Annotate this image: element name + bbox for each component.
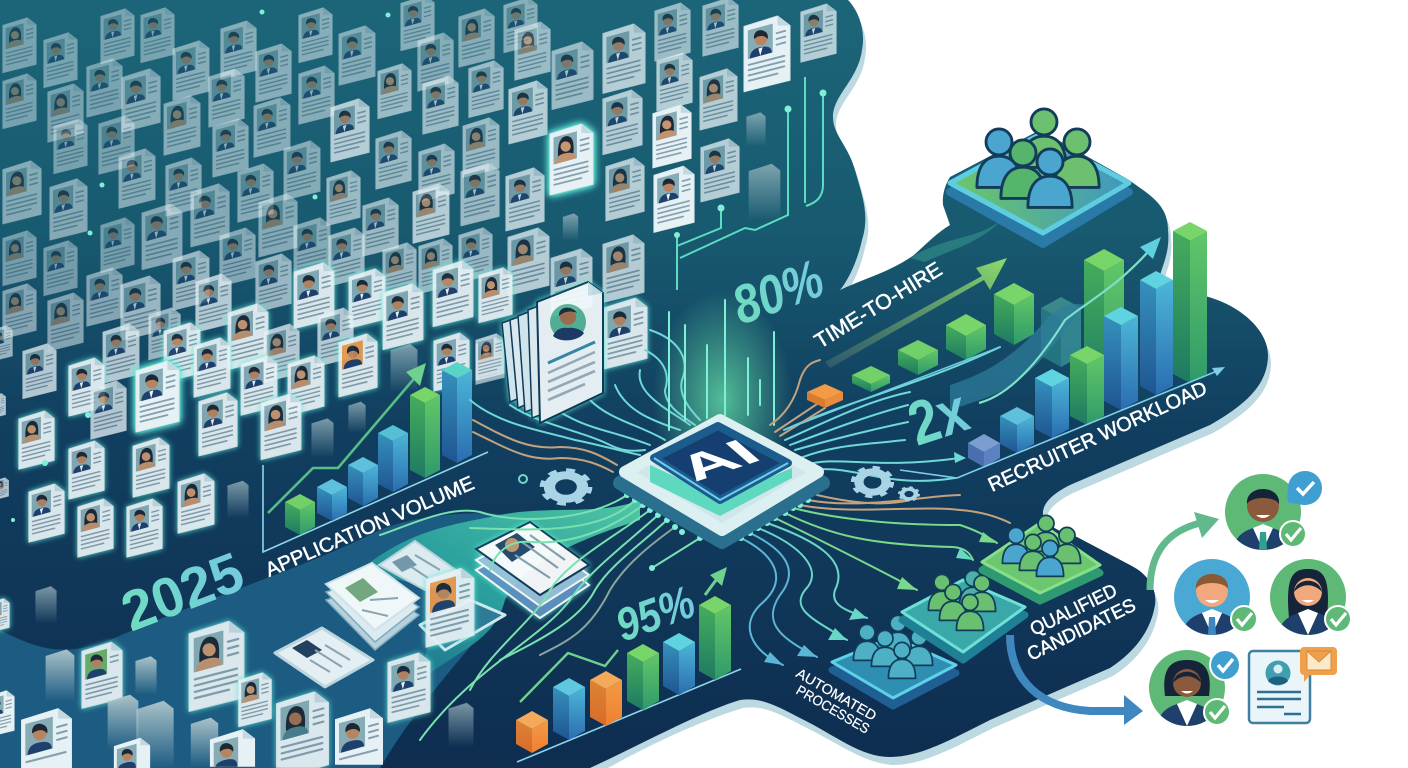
bar blue 5 <box>663 633 695 695</box>
timeline line <box>784 347 1000 430</box>
bar green 4 <box>627 644 659 710</box>
bar f1 <box>968 434 1000 467</box>
icon: green check 2 <box>1231 606 1257 632</box>
platform: talent pool, top <box>950 109 1129 244</box>
up arrow <box>705 567 727 595</box>
fifth row of resumes <box>3 194 644 317</box>
bar 4 <box>378 425 408 492</box>
lower left traces <box>380 495 700 740</box>
bar f2 <box>1000 407 1034 453</box>
main resume stack <box>502 282 603 423</box>
cube orange <box>807 384 843 408</box>
lower-left resume pile <box>0 522 589 768</box>
eighth row of resumes <box>0 381 301 557</box>
bar 6 <box>442 362 472 463</box>
right-of-stack resume <box>604 298 647 369</box>
AI label: AI <box>664 432 771 488</box>
stat: 80%: 80% <box>725 248 832 336</box>
flat card with photo <box>275 628 373 687</box>
bar green 6 <box>699 596 731 680</box>
arrowheads on traces <box>764 452 997 665</box>
AI chip <box>620 420 823 571</box>
heading: 2025: 2025 <box>113 540 252 643</box>
tan traces, upper left <box>473 420 617 472</box>
bar f4 <box>1070 346 1104 425</box>
lower right traces to platforms <box>741 533 817 665</box>
bar 1 <box>285 494 315 535</box>
bar orange 1 <box>516 711 548 753</box>
platform: middle <box>902 570 1025 660</box>
arrow: blue to candidate <box>1010 635 1143 725</box>
label: qualified candidates: CANDIDATES <box>1024 595 1139 665</box>
chart: recruiter workload <box>900 237 1225 478</box>
bar 3 <box>348 457 378 506</box>
icon: envelope bubble <box>1300 647 1337 682</box>
trend line <box>520 650 618 702</box>
stat: 95%: 95% <box>609 575 702 651</box>
avatar: candidate 1 <box>1225 474 1301 550</box>
resume card wall <box>0 0 836 748</box>
fourth row of resumes <box>3 141 499 247</box>
row of dim resumes <box>3 0 836 110</box>
chart: application volume <box>263 362 488 552</box>
platform: automated processes <box>832 615 956 706</box>
teal traces from the resume stack <box>470 330 700 455</box>
avatar: candidate 4 <box>1149 650 1225 726</box>
small gear <box>899 487 919 501</box>
circuit traces above the card wall <box>11 10 826 522</box>
icon: speech check <box>1287 471 1322 505</box>
time-to-hire growth arrow <box>825 258 1007 368</box>
left-of-stack resume <box>476 334 504 381</box>
label: automated processes: PROCESSES <box>794 682 873 737</box>
bar f5 <box>1104 307 1138 410</box>
arrow: green to candidate <box>1150 512 1219 590</box>
second row of resumes <box>3 53 737 168</box>
stat: 2x: 2x <box>900 376 977 459</box>
vertical signal traces above the chip <box>669 300 774 430</box>
circuit traces around the AI chip <box>380 300 1010 740</box>
platform: qualified candidates <box>982 515 1100 601</box>
label: qualified candidates: QUALIFIED <box>1027 580 1121 640</box>
ribbon <box>950 304 1085 410</box>
people group, qualified <box>1002 515 1081 576</box>
bar 5 <box>410 387 440 478</box>
tall green bar <box>1084 249 1124 400</box>
gear icons <box>519 468 919 503</box>
cube green 3 <box>946 314 986 360</box>
people group, top <box>977 109 1099 207</box>
tallest green bar <box>1173 222 1207 383</box>
bar blue 2 <box>553 678 585 740</box>
faded placeholder documents <box>35 112 780 748</box>
bar f6 <box>1140 271 1173 395</box>
cube green 1 <box>852 366 890 392</box>
third row of resumes <box>54 96 739 232</box>
icon: green check 3 <box>1325 606 1351 632</box>
icon: green check 1 <box>1280 521 1306 547</box>
cube green 2 <box>898 340 938 375</box>
sixth row of resumes <box>3 251 512 351</box>
chart: time-to-hire <box>784 222 1207 430</box>
label: automated processes: AUTOMATED <box>794 665 879 724</box>
small cog left <box>519 475 527 483</box>
label: recruiter workload: RECRUITER WORKLOAD <box>985 377 1210 497</box>
stack photo <box>550 304 586 340</box>
icon: resume document <box>1249 651 1310 723</box>
label: time-to-hire: TIME-TO-HIRE <box>811 258 946 353</box>
orange-photo resume <box>426 568 474 647</box>
cube green 4 <box>994 283 1034 345</box>
people group, middle <box>928 570 996 630</box>
bar 2 <box>317 479 347 521</box>
bar orange 3 <box>590 671 622 726</box>
stack of flat resumes, bright <box>476 522 589 618</box>
axis line <box>900 367 1225 478</box>
single flat resume <box>379 541 460 590</box>
stream to platform <box>910 222 1000 262</box>
seventh row of resumes <box>0 304 504 432</box>
avatar: candidate 3 <box>1270 559 1346 635</box>
trend arrow <box>268 363 426 513</box>
upper right traces <box>784 347 1000 481</box>
people group, automated <box>853 615 933 678</box>
avatar: candidate 2 <box>1174 559 1250 635</box>
label: application volume: APPLICATION VOLUME <box>262 472 478 582</box>
stack of flat resumes, lower <box>326 563 419 650</box>
cube teal 5 <box>1041 297 1081 367</box>
chip pins <box>624 492 811 571</box>
bar f3 <box>1035 369 1069 438</box>
chart: automated processes <box>516 567 741 762</box>
tablet card <box>420 600 505 650</box>
icon: blue check <box>1210 650 1240 680</box>
gear left <box>543 471 589 503</box>
trend curve arrow <box>979 237 1161 403</box>
icon: green check 4 <box>1204 699 1230 725</box>
gear right <box>854 468 891 496</box>
